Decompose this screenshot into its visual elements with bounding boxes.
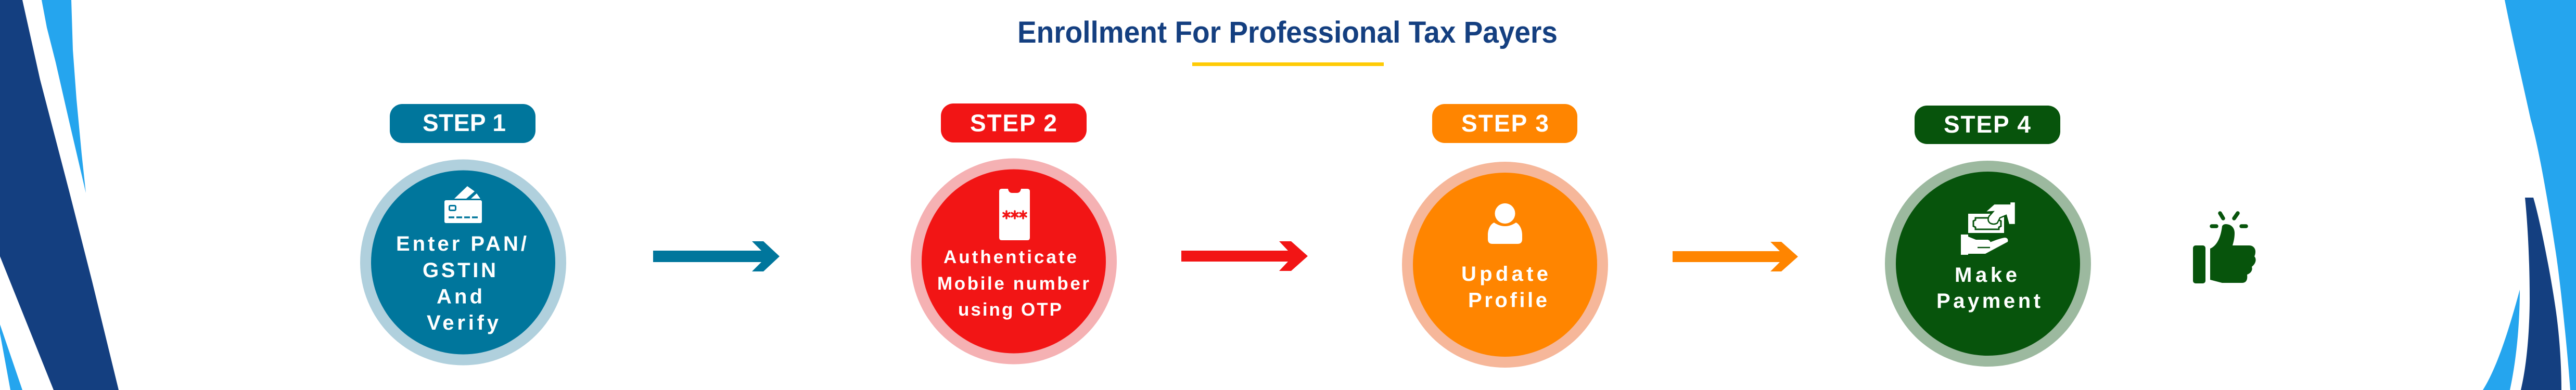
icon: thumbs up	[2193, 213, 2256, 283]
icon: phone with OTP	[999, 189, 1030, 240]
step 4 badge: STEP 4	[1944, 111, 2031, 138]
step 2 badge	[941, 103, 1087, 142]
step 1 badge: STEP 1	[423, 109, 506, 136]
step 2 text: Mobile number	[937, 274, 1089, 294]
step 4 text: Make	[1955, 264, 2017, 287]
arrow: step 2 to step 3	[1181, 241, 1308, 271]
icon: person	[1488, 203, 1522, 244]
step 1 circle	[360, 159, 566, 365]
panel: step 3	[1402, 104, 1608, 368]
step 3 text: Profile	[1468, 289, 1547, 312]
icon: cash payment hands	[1961, 202, 2016, 255]
step 4 text	[1936, 264, 2041, 313]
step 4 badge	[1915, 106, 2060, 144]
panel: step 1	[360, 104, 566, 365]
step 3 text	[1461, 263, 1548, 312]
arrow: step 1 to step 2	[653, 241, 780, 271]
step 3 circle	[1402, 162, 1608, 368]
step 2 circle	[911, 158, 1117, 364]
step 3 badge	[1432, 104, 1577, 143]
icon: credit card	[444, 186, 482, 223]
title: Enrollment For Professional Tax Payers	[1017, 16, 1558, 49]
step 1 text: GSTIN	[423, 259, 496, 282]
step 3 text: Update	[1461, 263, 1548, 285]
right corner decoration	[2483, 0, 2576, 390]
panel: step 4	[1885, 106, 2091, 367]
step 4 text: Payment	[1936, 290, 2041, 313]
step 1 text	[396, 232, 527, 334]
panel: step 2	[911, 103, 1117, 364]
step 2 badge: STEP 2	[970, 109, 1057, 136]
step 2 text: Authenticate	[943, 247, 1077, 267]
step 1 text: Verify	[427, 311, 499, 334]
step 2 text	[937, 247, 1089, 320]
step 3 badge: STEP 3	[1461, 110, 1549, 137]
step 1 text: Enter PAN/	[396, 232, 527, 255]
step 1 badge	[390, 104, 535, 143]
step 2 text: using OTP	[958, 300, 1062, 320]
step 4 circle	[1885, 161, 2091, 367]
arrow: step 3 to step 4	[1673, 242, 1798, 271]
step 1 text: And	[437, 285, 482, 308]
left corner decoration	[0, 0, 119, 390]
title underline	[1192, 62, 1384, 66]
